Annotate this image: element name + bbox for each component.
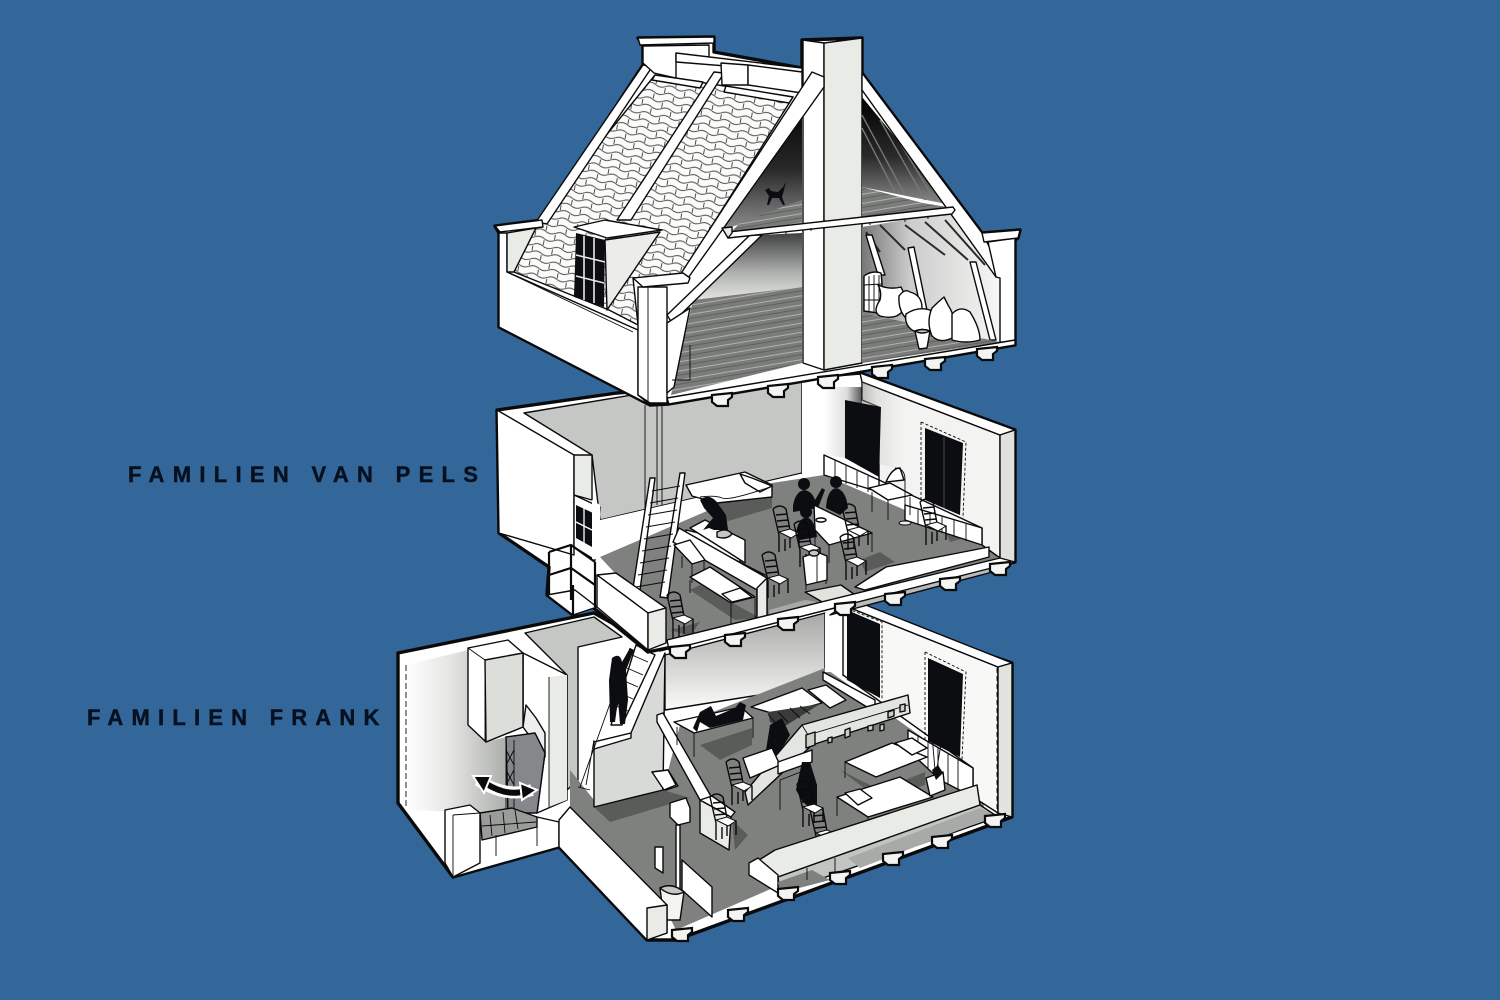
partition and desk with figure <box>673 497 767 624</box>
dormer window <box>574 220 662 310</box>
left partition <box>652 713 735 850</box>
right lower interior <box>862 212 1000 342</box>
chairs middle <box>667 499 946 638</box>
front low wall and slab <box>749 785 998 893</box>
washstand <box>652 770 676 790</box>
lower floor right <box>862 313 1000 363</box>
lower floor left <box>671 287 802 395</box>
main right roof edge <box>862 73 1000 277</box>
panel: attic <box>495 37 1020 406</box>
desk with seated figure <box>743 748 817 810</box>
ladder and wall with climbing figure <box>578 645 665 807</box>
roof with shingles <box>514 75 793 325</box>
lower white back wall strip <box>600 474 800 580</box>
single beds with reclining figure <box>674 685 846 757</box>
side table and floor lamp <box>869 468 912 525</box>
floor joists lower <box>672 814 1005 941</box>
double bed <box>686 472 772 503</box>
front wall of corridor <box>559 807 667 940</box>
lamp post and bucket <box>655 798 712 920</box>
pipe on back wall <box>645 403 662 510</box>
right wall <box>860 373 1015 562</box>
windows lower <box>843 607 966 760</box>
floor joists middle <box>670 562 1010 658</box>
upper floor left planks <box>731 200 802 232</box>
low wall and steps <box>445 805 559 877</box>
floor <box>600 475 1000 643</box>
floor joists attic <box>712 347 997 406</box>
floor shadows middle <box>670 497 975 636</box>
bookcase swinging door <box>468 640 545 757</box>
front floor edge attic <box>667 340 1015 404</box>
main left rafter <box>678 72 824 278</box>
panel: middle floor, van Pels family <box>497 373 1015 658</box>
chimney shaft <box>803 38 862 370</box>
hidden doorway <box>506 733 545 813</box>
parapet cap right of dormer <box>633 273 690 287</box>
corner post and cap <box>638 287 667 403</box>
left rafter <box>536 65 652 224</box>
main room back wall <box>665 613 825 710</box>
silhouette of middle floor <box>497 373 1015 652</box>
parapet left wall <box>495 220 650 405</box>
radiator rail middle <box>824 455 982 545</box>
ridge blocks <box>638 37 802 103</box>
dining table with figures <box>793 476 872 563</box>
chimney column lower <box>825 605 843 672</box>
left gable interior upper <box>723 100 802 228</box>
barrel <box>864 272 882 313</box>
right wall stub <box>982 230 1020 343</box>
plant box <box>926 735 945 796</box>
centre rafter <box>617 72 724 220</box>
back wall <box>524 381 802 520</box>
ladder middle <box>633 473 685 598</box>
right upper interior <box>862 97 953 218</box>
panel: lower floor, Frank family <box>398 602 1012 941</box>
left lower interior wall <box>693 233 802 300</box>
floor shadows lower <box>594 728 925 850</box>
front floor edge and ramp <box>667 547 1015 650</box>
windows middle <box>845 400 966 518</box>
silhouette of lower floor <box>398 605 1012 940</box>
main room floor <box>570 668 985 930</box>
scaffold frame by window <box>547 545 597 615</box>
double arrow: swinging bookcase <box>473 776 537 800</box>
attic silhouette <box>495 37 1020 405</box>
label: Familien Frank: FAMILIEN FRANK <box>87 705 388 730</box>
label: Familien van Pels: FAMILIEN VAN PELS <box>128 462 486 487</box>
chimney and wall column <box>802 381 862 475</box>
right wall lower <box>843 602 1012 817</box>
half wall at ladder foot <box>597 573 666 650</box>
large beds <box>837 738 933 828</box>
bucket <box>915 330 930 349</box>
left room walls <box>406 617 622 813</box>
radiator rail lower <box>823 672 973 797</box>
icon: cat <box>765 182 786 205</box>
grain sacks <box>876 285 980 342</box>
partition with pictures <box>745 695 910 805</box>
braces <box>667 235 762 393</box>
stove box on wheels <box>803 550 827 590</box>
left side wall and window <box>497 410 600 560</box>
chairs lower <box>710 759 836 853</box>
collar beam <box>722 207 955 238</box>
